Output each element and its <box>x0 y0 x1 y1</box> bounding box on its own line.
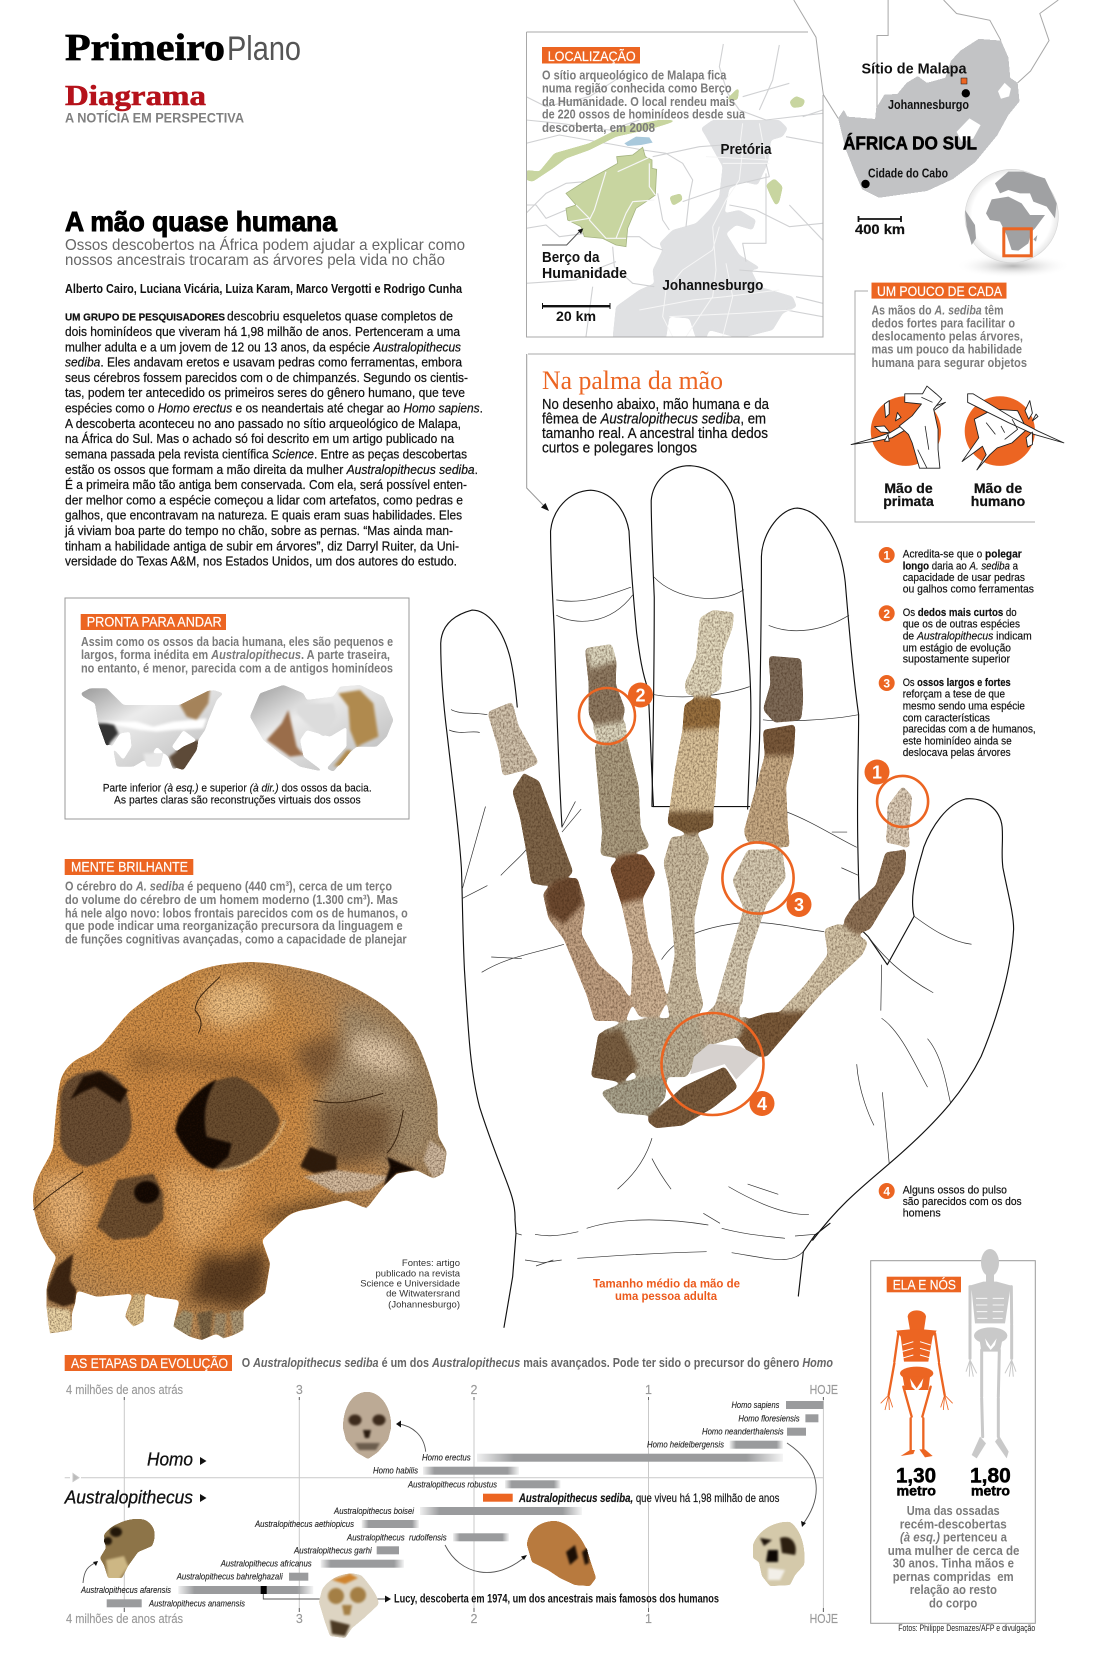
note 1: 1 <box>883 548 890 562</box>
section name: Diagrama: A NOTÍCIA EM PERSPECTIVA <box>65 110 244 126</box>
label: mão de humano: humano <box>971 493 1025 509</box>
photo: Homo skull <box>343 1392 391 1459</box>
species labels: Australopithecus afarensis <box>80 1585 171 1596</box>
body text: É a primeira mão tão antiga bem conservada. Com ela, será possível enten- <box>65 477 467 492</box>
hand size caption <box>593 1276 740 1303</box>
badge 1: 1 <box>872 762 882 782</box>
body text: estão os ossos que formam a mão direita da mulher Australopithecus sediba. <box>65 462 478 477</box>
species labels: Australopithecus aethiopicus <box>254 1519 354 1530</box>
arrows <box>83 1424 816 1599</box>
note 2: que os de outras espécies <box>903 619 1020 631</box>
note 4: Alguns ossos do pulso <box>903 1184 1007 1196</box>
body text: tinham a habilidade antiga de subir em árvores”, diz Darryl Ruiter, da Uni- <box>65 538 459 553</box>
note 4: são parecidos com os dos <box>903 1196 1022 1208</box>
text: um pouco de cada: humana para segurar objetos <box>872 356 1027 370</box>
map labels: Berço da <box>542 249 600 266</box>
text: ela e nós: (à esq.) pertenceu a <box>900 1530 1008 1545</box>
axis labels bottom <box>66 1612 838 1626</box>
text: pronta para andar <box>81 635 393 675</box>
note 3: parecidas com a de humanos, <box>903 724 1036 736</box>
label: A. sediba: Australopithecus sediba, que viveu há 1,98 milhão de anos <box>518 1491 779 1505</box>
text: mente brilhante: O cérebro do A. sediba é pequeno (440 cm³), cerca de um terço <box>65 880 392 894</box>
marker: Lucy <box>261 1586 267 1594</box>
badge 2: 2 <box>635 686 646 706</box>
label: mão de humano <box>971 480 1025 509</box>
map scale bar: 20 km <box>556 308 596 324</box>
panel: localização map <box>526 32 823 338</box>
body text: der melhor como a espécie começou a lidar com artefatos, como pedras e <box>65 492 463 507</box>
text: localização: de 220 ossos de hominídeos desde sua <box>542 108 746 122</box>
species labels: Homo floresiensis <box>738 1413 800 1424</box>
photo: Lucy skull <box>319 1574 378 1638</box>
title: A mão quase humana <box>65 206 337 237</box>
photo: A. sediba small skull <box>527 1521 596 1586</box>
skeleton: human (grey) <box>966 1249 1016 1458</box>
measure: 1,30 metro: metro <box>896 1483 936 1499</box>
axis labels bottom: 3 <box>296 1612 303 1626</box>
wrist lines <box>504 1213 830 1327</box>
source note: de Witwatersrand <box>386 1289 460 1300</box>
axis labels top: 1 <box>645 1383 652 1397</box>
section name: Diagrama: Diagrama <box>65 80 207 112</box>
body text: tas, podem ter antecedido os primeiros seres do gênero humano, que teve <box>65 385 465 400</box>
species labels: Australopithecus robustus <box>407 1479 497 1490</box>
note 3: deslocava pelas árvores <box>903 747 1011 759</box>
text: localização: descoberta, em 2008 <box>542 121 655 135</box>
body text: versidade do Texas A&M, nos Estados Unidos, um dos autores do estudo. <box>65 554 457 569</box>
panel: pronta para andar <box>65 598 409 819</box>
photo credit: Fotos: Philippe Desmazes/AFP e divulgação <box>898 1623 1035 1633</box>
text: mente brilhante: que pode indicar uma reorganização precursora da linguagem e <box>65 919 403 933</box>
panel: um pouco de cada <box>528 283 1064 522</box>
axis labels bottom: 1 <box>645 1612 652 1626</box>
text: na palma da mão: fêmea de Australopithecus sediba, em <box>542 412 766 428</box>
text: na palma da mão: No desenho abaixo, mão humana e da <box>542 397 770 413</box>
note 2: um estágio de evolução <box>903 642 1011 654</box>
timeline intro: O Australopithecus sediba é um dos Australopithecus mais avançados. Pode ter sido o precursor do gênero Homo <box>242 1356 833 1370</box>
bar: A. sediba <box>483 1494 513 1502</box>
text: ela e nós: pernas compridas em <box>893 1569 1014 1584</box>
note 3: com características <box>903 712 990 724</box>
timeline chart <box>64 1383 838 1638</box>
note 4: homens <box>903 1208 941 1220</box>
panel: ela e nós <box>871 1249 1035 1623</box>
map: South Africa <box>794 0 1058 237</box>
text: localização: da Humanidade. O local rendeu mais <box>542 95 735 109</box>
fossil hand bones <box>487 610 912 1128</box>
text: ela e nós: 30 anos. Tinha mãos e <box>893 1556 1014 1571</box>
tag: localização: LOCALIZAÇÃO <box>548 49 636 64</box>
source note: Fontes: artigo <box>402 1258 460 1269</box>
note 1: capacidade de usar pedras <box>903 572 1025 584</box>
subtitle: Ossos descobertos na África podem ajudar a explicar como <box>65 235 465 254</box>
label: África do Sul: ÁFRICA DO SUL <box>843 132 977 153</box>
text: ela e nós: relação ao resto <box>910 1582 997 1597</box>
measure: 1,80 metro: 1,80 <box>970 1465 1011 1488</box>
species labels: Australopithecus garhi <box>293 1545 372 1556</box>
tag: pronta para andar: PRONTA PARA ANDAR <box>87 615 222 630</box>
species labels: Homo erectus <box>422 1453 471 1464</box>
label: Lucy: Lucy, descoberta em 1974, um dos ancestrais mais famosos dos humanos <box>394 1591 719 1605</box>
text: um pouco de cada: As mãos do A. sediba têm <box>872 303 1004 317</box>
text: um pouco de cada: mas um pouco da habilidade <box>872 343 1022 357</box>
badge 3: 3 <box>794 895 804 915</box>
label: mão de primata <box>883 480 934 509</box>
text: um pouco de cada: deslocamento pelas árvores, <box>872 329 1023 343</box>
marker: Johannesburgo: Johannesburgo <box>888 98 969 112</box>
marker: Malapa <box>961 78 967 84</box>
caption: pelvis: As partes claras são reconstruções virtuais dos ossos <box>114 794 361 806</box>
species labels: Homo habilis <box>373 1466 418 1477</box>
label: mão de primata: primata <box>883 493 934 509</box>
photo: skull of A. sediba <box>33 962 447 1342</box>
measure: 1,80 metro <box>970 1465 1011 1499</box>
badge 1 <box>864 760 890 784</box>
axis labels top: 3 <box>296 1383 303 1397</box>
body text: descobriu esqueletos quase completos de <box>227 309 453 324</box>
callouts on hand <box>579 682 928 1116</box>
note 2: Os dedos mais curtos do <box>903 607 1017 619</box>
section masthead <box>65 27 301 69</box>
heading: Na palma da mão: Na palma da mão <box>542 366 723 395</box>
body text: na África do Sul. Mas o achado só foi descrito em um artigo publicado na <box>65 431 455 446</box>
axis labels bottom: 2 <box>471 1612 478 1626</box>
body text: galhos, que encontravam na natureza. E quais eram suas habilidades. Eles <box>65 508 462 523</box>
label: mão de humano: Mão de <box>974 480 1022 496</box>
note 2: de Australopithecus indicam <box>903 630 1032 642</box>
scale bar: 400 km: 400 km <box>855 221 905 237</box>
axis labels top: HOJE <box>810 1383 838 1397</box>
icon: primate hand <box>851 386 945 468</box>
text: pronta para andar: Assim como os ossos da bacia humana, eles são pequenos e <box>81 635 393 649</box>
body text <box>64 309 483 569</box>
panel: mente brilhante <box>65 859 408 946</box>
note 3: reforçam a tese de que <box>903 689 1005 701</box>
badge 3 <box>786 892 812 917</box>
note 4: 4 <box>883 1184 890 1198</box>
measure: 1,30 metro <box>896 1465 936 1499</box>
bars <box>107 1401 823 1607</box>
text: na palma da mão: curtos e polegares longos <box>542 441 697 457</box>
photo: modern skull <box>753 1522 804 1586</box>
text: na palma da mão: tamanho real. A ancestral tinha dedos <box>542 426 768 442</box>
map labels: Johannesburgo <box>662 277 763 294</box>
tag: mente brilhante: MENTE BRILHANTE <box>71 860 188 875</box>
hand size caption: uma pessoa adulta <box>615 1289 717 1303</box>
hand size caption: Tamanho médio da mão de <box>593 1276 740 1290</box>
species labels: Australopithecus rudolfensis <box>346 1532 447 1543</box>
skeleton: A. sediba (orange) <box>881 1310 953 1457</box>
badge 2 <box>628 682 653 708</box>
text: mente brilhante: do volume do cérebro de um homem moderno (1.300 cm³). Mas <box>65 893 398 907</box>
map artwork <box>526 44 823 338</box>
caption: pelvis <box>103 783 372 806</box>
species labels <box>80 1400 800 1609</box>
skull shading <box>40 980 447 1342</box>
axis labels bottom: HOJE <box>810 1612 838 1626</box>
text: ela e nós: do corpo <box>929 1595 977 1610</box>
axis labels top <box>66 1383 838 1397</box>
text: pronta para andar: largos, forma inédita em Australopithecus. A parte traseira, <box>81 648 390 662</box>
map labels <box>542 141 772 294</box>
text: localização: O sítio arqueológico de Malapa fica <box>542 68 727 82</box>
text: localização <box>542 68 746 135</box>
caption: pelvis: Parte inferior (à esq.) e superior (à dir.) dos ossos da bacia. <box>103 783 372 795</box>
section masthead: Primeiro <box>65 27 225 69</box>
text: ela e nós <box>888 1503 1019 1610</box>
species labels: Australopithecus boisei <box>333 1506 415 1517</box>
arrow: to hand <box>527 354 549 511</box>
subtitle <box>65 235 465 269</box>
source note: publicado na revista <box>376 1268 461 1279</box>
badge 4 <box>750 1091 774 1116</box>
section masthead: Plano <box>227 30 301 68</box>
species labels: Homo heidelbergensis <box>647 1440 724 1451</box>
label: mão de primata: Mão de <box>884 480 933 496</box>
note 3 <box>879 675 1036 759</box>
text: pronta para andar: no entanto, é menor, parecida com a de antigos hominídeos <box>81 661 393 675</box>
note 3: este hominídeo ainda se <box>903 736 1012 748</box>
note 2 <box>879 605 1032 666</box>
genus label: Australopithecus: Australopithecus <box>64 1487 193 1507</box>
text: mente brilhante: de funções cognitivas avançadas, como a capacidade de planejar <box>65 932 407 946</box>
map labels: Humanidade <box>542 265 627 282</box>
text: um pouco de cada <box>872 303 1027 370</box>
body text: mulher adulta e a um jovem de 12 ou 13 anos, da espécie Australopithecus <box>65 339 461 354</box>
authors: Alberto Cairo, Luciana Vicária, Luiza Karam, Marco Vergotti e Rodrigo Cunha <box>65 282 463 296</box>
body text: A descoberta aconteceu no ano passado no sítio arqueológico de Malapa, <box>65 416 461 431</box>
photo: A. afarensis skull <box>100 1519 155 1578</box>
label: Sítio de Malapa: Sítio de Malapa <box>862 62 967 78</box>
tag: ela e nós: ELA E NÓS <box>893 1277 956 1292</box>
map scale bar <box>542 303 610 324</box>
subtitle: nossos ancestrais trocaram as árvores pela vida no chão <box>65 252 445 269</box>
text: mente brilhante: há nele algo novo: lobos frontais parecidos com os de humanos, o <box>65 906 408 920</box>
pelvis: inferior view <box>81 688 223 770</box>
note 2: supostamente superior <box>903 654 1010 666</box>
measure: 1,80 metro: metro <box>971 1483 1010 1499</box>
note 3: mesmo sendo uma espécie <box>903 700 1025 712</box>
body text: sediba. Eles andavam eretos e usavam pedras como ferramentas, embora <box>65 355 463 370</box>
icon: human hand <box>962 394 1064 470</box>
source note: (Johannesburgo) <box>388 1299 460 1310</box>
axis labels top: 2 <box>471 1383 478 1397</box>
axis grid <box>65 1397 823 1612</box>
measure: 1,30 metro: 1,30 <box>896 1465 936 1488</box>
source note: Science e Universidade <box>360 1279 460 1290</box>
note 1: ou galhos como ferramentas <box>903 584 1034 596</box>
text: um pouco de cada: dedos fortes para facilitar o <box>872 317 1015 331</box>
badge 4: 4 <box>757 1094 767 1114</box>
timeline heading: AS ETAPAS DA EVOLUÇÃO <box>71 1356 228 1371</box>
note 3: Os ossos largos e fortes <box>903 677 1011 689</box>
note 3: 3 <box>883 676 890 690</box>
body text: seus cérebros fossem parecidos com o de chimpanzés. Segundo os cientis- <box>65 370 468 385</box>
body text: semana passada pela revista científica Science. Entre as peças descobertas <box>65 446 467 462</box>
skull cracks <box>33 977 403 1210</box>
note 1: Acredita-se que o polegar <box>903 549 1022 561</box>
text: localização: numa região conhecida como Berço <box>542 82 732 96</box>
axis labels top: 4 milhões de anos atrás <box>66 1383 183 1397</box>
tag: um pouco de cada: UM POUCO DE CADA <box>877 284 1002 299</box>
note 4 <box>879 1183 1022 1220</box>
text: na palma da mão <box>542 397 770 457</box>
body text: já viviam boa parte do tempo no chão, sobre as pernas. “Mas ainda man- <box>64 523 453 538</box>
genus label: Homo: Homo <box>147 1450 193 1470</box>
axis labels bottom: 4 milhões de anos atrás <box>66 1612 183 1626</box>
skull base <box>33 962 447 1340</box>
marker: Cidade do Cabo <box>861 166 948 188</box>
species labels: Homo sapiens <box>732 1400 780 1411</box>
text: ela e nós: uma mulher de cerca de <box>888 1543 1019 1558</box>
species labels: Australopithecus anamensis <box>148 1598 245 1609</box>
marker: Cidade do Cabo: Cidade do Cabo <box>868 166 948 180</box>
note 1 <box>879 547 1034 596</box>
species labels: Australopithecus bahrelghazali <box>176 1572 283 1583</box>
text: ela e nós: recém-descobertas <box>900 1516 1007 1531</box>
text: ela e nós: Uma das ossadas <box>907 1503 1000 1518</box>
section name: Diagrama <box>65 80 244 126</box>
body text: dois hominídeos que viveram há 1,98 milhão de anos. Pertenceram a uma <box>65 324 461 339</box>
text: mente brilhante <box>65 880 408 946</box>
species labels: Australopithecus africanus <box>220 1559 312 1570</box>
body text: UM GRUPO DE PESQUISADORES <box>65 312 225 324</box>
map labels: Pretória <box>720 141 772 158</box>
body text: espécies como o Homo erectus e os neandertais até chegar ao Homo sapiens. <box>65 401 483 416</box>
marker: Johannesburgo <box>888 89 970 112</box>
note 1: longo daria ao A. sediba a <box>903 560 1019 572</box>
note 2: 2 <box>883 607 890 621</box>
species labels: Homo neanderthalensis <box>702 1427 784 1438</box>
source note <box>360 1258 461 1310</box>
pelvis: superior view <box>250 685 393 772</box>
icon: globe <box>955 169 1071 278</box>
skull texture <box>33 962 447 1340</box>
hand drawing <box>441 466 1014 1327</box>
